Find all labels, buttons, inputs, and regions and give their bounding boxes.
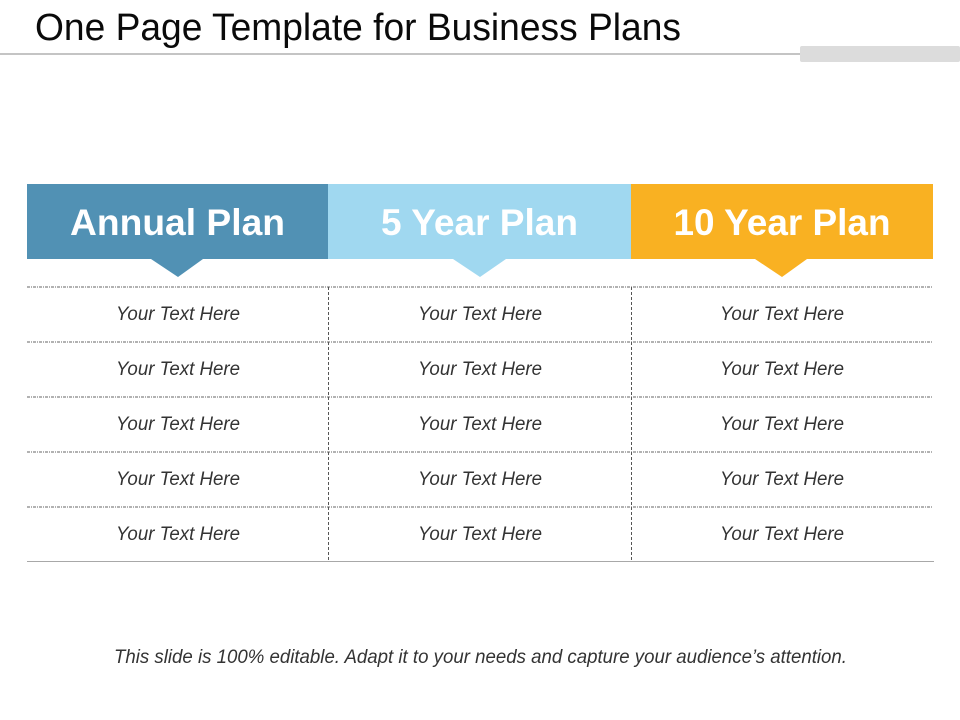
table column: 10 year plan — [720, 304, 844, 545]
table column: annual plan — [116, 304, 240, 545]
table column: 10 year plan: Your Text Here — [720, 359, 844, 380]
header: annual plan — [27, 184, 328, 277]
table column: 5 year plan: Your Text Here — [418, 414, 542, 435]
table column: 5 year plan: Your Text Here — [418, 359, 542, 380]
grey tab — [800, 46, 960, 62]
table grid — [27, 287, 934, 562]
table column: 10 year plan: Your Text Here — [720, 304, 844, 325]
header: 10 year plan — [631, 184, 933, 277]
table column: annual plan: Your Text Here — [116, 469, 240, 490]
header: annual plan: Annual Plan — [70, 202, 285, 243]
title: One Page Template for Business Plans — [35, 7, 681, 49]
header: 5 year plan — [328, 184, 631, 277]
table column: 10 year plan: Your Text Here — [720, 469, 844, 490]
title rule — [0, 53, 800, 55]
table column: 5 year plan: Your Text Here — [418, 469, 542, 490]
table column: 10 year plan: Your Text Here — [720, 414, 844, 435]
table column: 10 year plan: Your Text Here — [720, 524, 844, 545]
table column: 5 year plan — [418, 304, 542, 545]
footer note: This slide is 100% editable. Adapt it to your needs and capture your audience’s attention. — [114, 647, 847, 668]
header: 10 year plan: 10 Year Plan — [674, 202, 890, 243]
table column: annual plan: Your Text Here — [116, 414, 240, 435]
table column: 5 year plan: Your Text Here — [418, 524, 542, 545]
table column: annual plan: Your Text Here — [116, 359, 240, 380]
table column: annual plan: Your Text Here — [116, 524, 240, 545]
table column: 5 year plan: Your Text Here — [418, 304, 542, 325]
header: 5 year plan: 5 Year Plan — [381, 202, 578, 243]
table column: annual plan: Your Text Here — [116, 304, 240, 325]
